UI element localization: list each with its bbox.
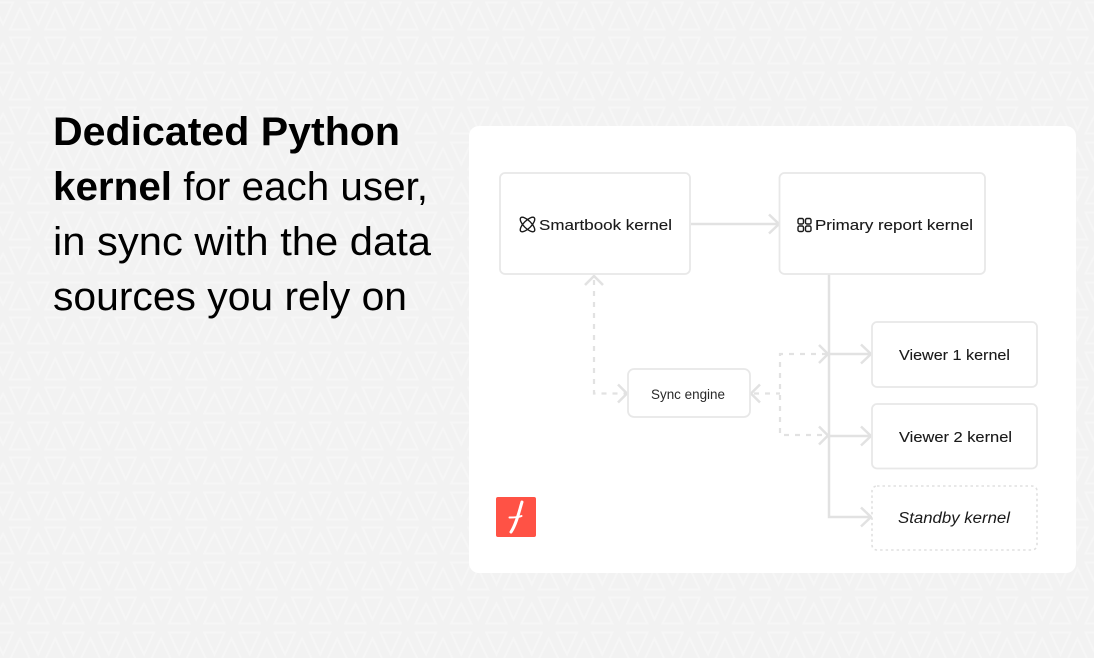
box: primary report kernel bbox=[780, 173, 985, 274]
label: standby kernel: Standby kernel bbox=[898, 510, 1011, 527]
box: viewer 2 kernel bbox=[872, 404, 1037, 468]
box: standby kernel bbox=[872, 486, 1037, 550]
arrow: smartbook to primary bbox=[691, 214, 779, 234]
heading: kernel for each user, bbox=[53, 165, 428, 209]
label: viewer 1 kernel: Viewer 1 kernel bbox=[899, 347, 1010, 364]
box: sync engine bbox=[628, 369, 750, 417]
label: sync engine: Sync engine bbox=[651, 386, 725, 402]
arrow: sync engine to smartbook, dashed bbox=[585, 276, 627, 402]
heading: in sync with the data bbox=[53, 220, 432, 264]
label: smartbook kernel: Smartbook kernel bbox=[539, 217, 672, 234]
heading bbox=[53, 110, 432, 319]
box: viewer 1 kernel bbox=[872, 322, 1037, 387]
icon: primary report grid bbox=[798, 218, 811, 232]
heading: sources you rely on bbox=[53, 275, 407, 319]
heading: Dedicated Python bbox=[53, 110, 400, 154]
arrow: primary to viewers and standby bbox=[829, 274, 871, 526]
panel: diagram card bbox=[469, 126, 1076, 573]
arrow: sync engine to viewers, dashed bbox=[751, 345, 828, 444]
label: primary report kernel: Primary report kernel bbox=[815, 217, 973, 234]
icon: smartbook atom bbox=[518, 215, 537, 234]
icon: red logo bbox=[496, 497, 536, 537]
label: viewer 2 kernel: Viewer 2 kernel bbox=[899, 429, 1012, 446]
box: smartbook kernel bbox=[500, 173, 690, 274]
